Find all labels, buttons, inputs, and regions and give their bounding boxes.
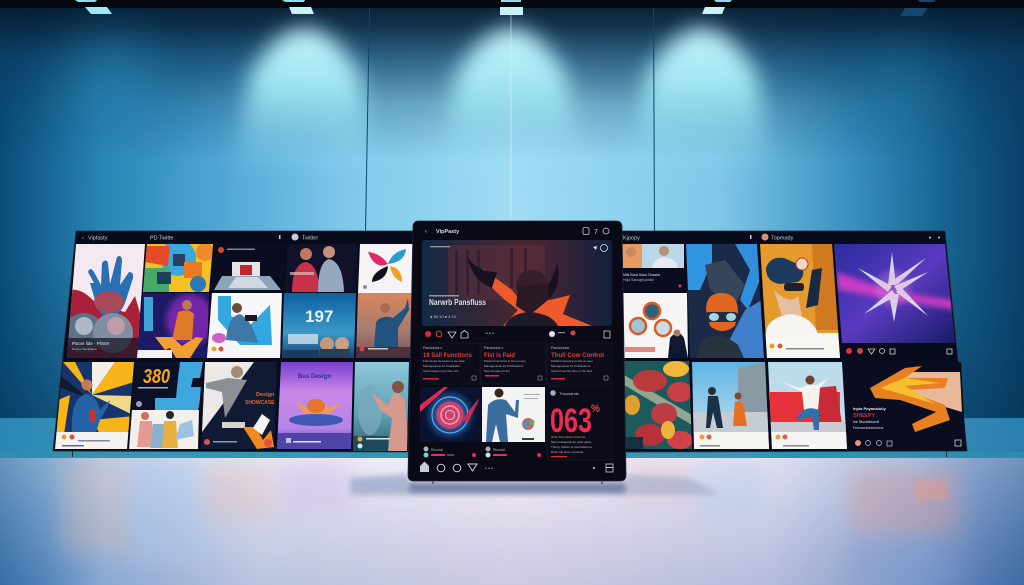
tile: red and yellow faces pattern	[624, 361, 693, 450]
tile: neon spiral	[420, 387, 481, 442]
tile: purple product poster: Bus Design	[298, 374, 331, 380]
left panel header: Twitter	[302, 236, 318, 242]
tablet action icons: • • •	[486, 331, 494, 337]
tile: video call card: Hoja Sanoghyantial	[623, 278, 654, 282]
card: paid	[481, 343, 546, 384]
tile: man in suit	[356, 293, 412, 359]
tile: flame arrow poster: Inpia Poyanaluity	[853, 406, 887, 411]
tile: colourful collage	[143, 244, 213, 292]
statistic card: 063%: Sipso Hoasond wo poiet qenty	[551, 440, 592, 444]
tile: flame arrow poster: Ine Stocksfeuruit	[853, 420, 879, 424]
tile: camera man	[207, 293, 282, 358]
right panel header: Kjpopy	[623, 236, 640, 242]
tile: woman in pink dress	[353, 362, 409, 452]
tile: man in blue tracksuit	[482, 387, 545, 442]
card: control: Thull Cow Control	[551, 352, 604, 359]
man tile caption	[486, 446, 541, 458]
tablet header	[425, 228, 609, 236]
tile: blue hand: Pixcer lide · Plinter	[72, 341, 110, 346]
background wall	[0, 0, 1024, 420]
hero banner: ● 80 10 ● 4 10	[430, 314, 457, 319]
tablet header: 7	[594, 229, 598, 236]
tile: diagonal poster: SHOWCASE	[245, 400, 275, 406]
tablet action icons	[425, 330, 610, 338]
statistic card: 063%: Rhar Sinvudsiion fuiterals	[551, 435, 586, 439]
card: control: Pissibd Gerevice to Noi on aser	[551, 359, 593, 363]
tile: X logo	[358, 244, 414, 294]
card: functions: Sevie Rayiors per tilso otis	[423, 369, 459, 373]
man tile caption: Rizonal	[493, 448, 505, 452]
statistic card: 063%: Dinnr toit tems oyotosne	[551, 450, 584, 454]
tile: video call card	[622, 244, 684, 288]
right panel header	[623, 234, 940, 242]
tile: street scene	[692, 362, 770, 450]
left panel header: PD Twitte	[150, 236, 173, 242]
left panel header: Vipfasty	[88, 236, 108, 242]
statistic card: 063%: %	[591, 403, 600, 415]
card: control: Sevie Poop ffor lime in the flow	[551, 369, 593, 373]
card: control: Manegenieas for Kindlseilons	[551, 364, 591, 368]
tile: blue hand	[67, 244, 145, 358]
tile: diagonal poster: Design	[256, 392, 275, 398]
card: functions: Fremsiosd Gervices to tou clasr	[423, 359, 465, 363]
tablet header: ‹	[425, 229, 427, 235]
right panel header: Topmady	[771, 236, 794, 242]
tile: yellow rays	[55, 362, 135, 450]
tile: dancer	[768, 362, 848, 450]
tile: 380 dark	[132, 362, 204, 411]
tile: stage scene	[212, 244, 281, 290]
statistic card: 063%	[547, 386, 612, 460]
tile: orange robot head	[686, 244, 766, 359]
tile: video call card: Mits Bord Sono Chasha	[623, 273, 660, 277]
tablet bottom navigation	[420, 462, 613, 472]
hero banner	[422, 240, 612, 326]
card: paid: Panacelus o	[484, 346, 503, 350]
tablet bottom navigation: • • •	[485, 466, 493, 472]
ceiling light rail	[0, 0, 1024, 16]
panel: right social gallery	[618, 231, 968, 457]
tile: diagonal poster	[201, 362, 277, 450]
tile: blue 197	[282, 293, 357, 359]
tile: 380 dark: 380	[143, 366, 170, 388]
statistic card: 063%: Themy Sistion to ciet lookup tu	[551, 445, 592, 449]
spiral tile caption	[424, 446, 476, 458]
floor	[0, 418, 1024, 585]
card: functions	[421, 343, 480, 384]
tile: blue 197: 197	[305, 307, 333, 326]
tile: flame arrow poster: SHEEPY	[853, 413, 876, 419]
statistic card: 063%: Thousands	[559, 391, 579, 396]
tile: purple portrait	[137, 293, 214, 358]
tile: VR headset	[760, 244, 842, 359]
tile: silver star burst	[834, 244, 956, 344]
tile: orange rings	[622, 293, 688, 358]
card: control: Panaceluse	[551, 346, 569, 350]
star tile action icons	[846, 348, 952, 354]
card: paid: Fist is Paid	[484, 352, 515, 359]
left panel header: ‹	[82, 236, 84, 242]
tile: purple product poster	[277, 362, 355, 450]
hero banner: Narwrb Pansfluss	[429, 298, 486, 307]
statistic card: 063%: 063	[550, 402, 592, 440]
card: paid: Pissibd Gervicies to Noi on aeu	[484, 359, 526, 363]
card: paid: Sevi Pooplia for lim	[484, 369, 510, 373]
card: functions: 19 Sall Functions	[423, 352, 472, 359]
tile: sketched figures	[129, 410, 201, 450]
card: functions: Panacelus o	[423, 346, 442, 350]
tablet header: VipPasty	[436, 229, 460, 235]
spiral tile caption: Rizonal	[431, 448, 443, 452]
left panel header	[82, 234, 318, 242]
card: control	[547, 343, 612, 384]
tile: blue hand: Nanmo Siedolapre	[72, 347, 97, 351]
card: paid: Manegenieas for Kindlseilons	[484, 364, 524, 368]
tile: flame arrow poster	[853, 362, 966, 446]
tile: couple portrait	[285, 244, 359, 293]
panel: left social gallery	[53, 231, 416, 457]
tile: flame arrow poster: Felcowstionieulions	[853, 426, 884, 430]
card: functions: Manegenieos for Kindlsaltor	[423, 364, 460, 368]
tablet device	[408, 221, 626, 484]
